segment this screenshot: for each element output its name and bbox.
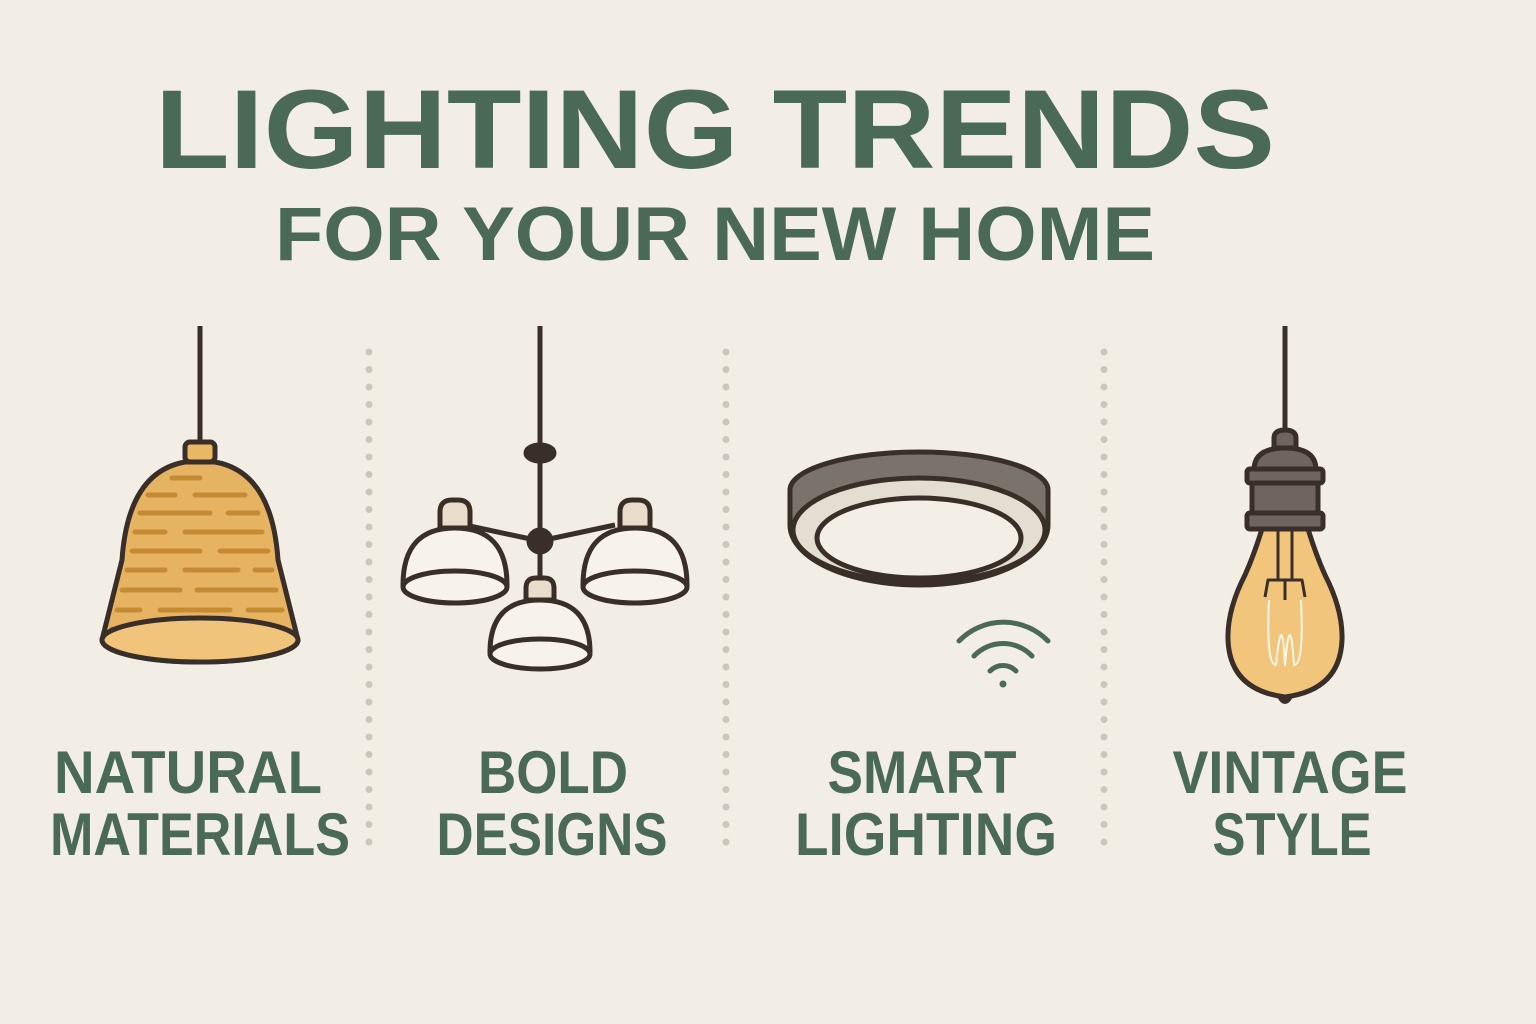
icon: vintage bulb [1228,326,1342,702]
label: natural materials: MATERIALS [50,801,350,868]
icon: smart ceiling light [790,452,1048,585]
label: bold designs [436,739,668,868]
icon: wifi [959,622,1048,688]
label: vintage style: VINTAGE [1172,739,1408,806]
label: bold designs: BOLD [478,739,628,806]
label: vintage style: STYLE [1212,801,1372,868]
label: smart lighting: LIGHTING [795,801,1057,868]
icon: woven pendant [102,326,298,662]
label: natural materials [50,739,350,868]
label: bold designs: DESIGNS [436,801,668,868]
subtitle: FOR YOUR NEW HOME [275,192,1155,277]
label: vintage style [1172,739,1408,868]
label: smart lighting: SMART [828,739,1016,806]
title: LIGHTING TRENDS [155,67,1275,192]
label: smart lighting [795,739,1057,868]
icon: chandelier [403,326,687,669]
label: natural materials: NATURAL [54,739,322,806]
